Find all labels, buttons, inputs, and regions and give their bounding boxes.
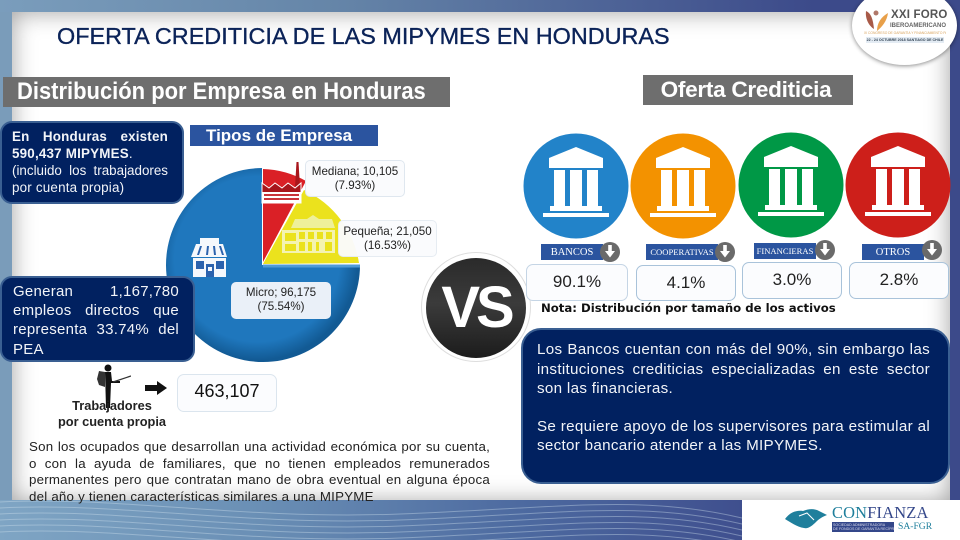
callout: mipymes: (incluido los trabajadores xyxy=(12,163,168,178)
circle: cooperativas xyxy=(630,134,736,238)
label: bancos: BANCOS xyxy=(551,247,593,258)
circle: financieras xyxy=(738,132,844,238)
vs disc xyxy=(426,258,526,358)
note: Nota: Distribución por tamaño de los activos xyxy=(541,301,836,315)
icon: handshake xyxy=(785,509,827,528)
pie chart xyxy=(166,162,360,362)
vs badge xyxy=(421,252,531,362)
heading: tipos de empresa: Tipos de Empresa xyxy=(206,126,352,145)
label: cooperativas xyxy=(646,244,718,260)
label: mediana xyxy=(305,160,405,197)
number box: trabajadores xyxy=(177,374,277,412)
icons: down arrows xyxy=(600,240,942,262)
label: pequena: (16.53%) xyxy=(364,239,411,252)
value: otros xyxy=(849,262,949,299)
callout: empleos: empleos directos que xyxy=(13,302,179,319)
text block: definicion: Son los ocupados que desarrollan una actividad económica por su cuenta, xyxy=(29,439,490,454)
value: bancos xyxy=(526,264,628,301)
label: bancos xyxy=(541,244,603,260)
logo name: XXI FORO xyxy=(891,9,948,21)
value: financieras: 3.0% xyxy=(773,270,811,289)
value: cooperativas: 4.1% xyxy=(667,273,705,292)
number box: trabajadores: 463,107 xyxy=(194,381,260,401)
heading: oferta crediticia: Oferta Crediticia xyxy=(661,77,831,102)
logo: XXI Foro Iberoamericano xyxy=(852,0,957,65)
callout: bancos: Los Bancos cuentan con más del 90%, sin embargo las xyxy=(537,341,930,358)
callout: empleos: Generan 1,167,780 xyxy=(13,283,179,300)
callout: bancos: sector bancario atender a las MIPYMES. xyxy=(537,437,823,454)
icon: office building xyxy=(282,215,335,253)
slice: mediana xyxy=(263,169,306,262)
worker label xyxy=(58,398,166,429)
callout: bancos xyxy=(521,328,950,484)
logo date xyxy=(866,37,944,43)
worker label: por cuenta propia xyxy=(58,414,166,429)
bottom ribbon xyxy=(0,500,742,540)
label: micro: Micro; 96,175 xyxy=(246,286,316,299)
slice: micro xyxy=(166,168,360,362)
icons: institution circles xyxy=(524,132,950,238)
callout: bancos: son las financieras. xyxy=(537,380,673,397)
label: otros: OTROS xyxy=(876,247,910,258)
label: financieras: FINANCIERAS xyxy=(757,246,813,256)
logo subtitle: IBEROAMERICANO xyxy=(890,23,946,29)
logo wordmark: CONFIANZA xyxy=(832,503,929,522)
slice: pequena xyxy=(263,190,359,264)
label: pequena xyxy=(338,220,437,257)
label: cooperativas: COOPERATIVAS xyxy=(650,247,714,257)
callout: empleos: representa 33.74% del xyxy=(13,321,179,338)
title: OFERTA CREDITICIA DE LAS MIPYMES EN HONDURAS xyxy=(57,23,670,49)
logo date: 22 - 24 OCTUBRE 2018 SANTIAGO DE CHILE xyxy=(867,38,943,42)
text block: definicion: o con la ayuda de familiares, que no tienen empleados remunerados xyxy=(29,456,490,471)
label: micro: (75.54%) xyxy=(257,300,305,313)
callout: mipymes: 590,437 MIPYMES. xyxy=(12,146,133,161)
label: pequena: Pequeña; 21,050 xyxy=(343,225,432,238)
heading: oferta crediticia xyxy=(643,75,853,105)
callout: mipymes: En Honduras existen xyxy=(12,129,168,144)
heading: distribucion: Distribución por Empresa en Honduras xyxy=(17,79,426,105)
icon: factory xyxy=(262,162,301,203)
callout: bancos: instituciones crediticias especializadas en este sector xyxy=(537,361,930,378)
callout: mipymes xyxy=(0,121,184,204)
circle: otros xyxy=(846,132,950,238)
value: cooperativas xyxy=(636,265,736,301)
circle: bancos xyxy=(524,134,628,238)
text block: definicion: permanentes pero que contratan mano de obra eventual en alguna época xyxy=(29,472,490,487)
vs disc: VS xyxy=(441,275,511,340)
logo subtitle: SOCIEDAD ADMINISTRADORA xyxy=(833,522,885,526)
label: otros xyxy=(862,244,924,260)
arrow xyxy=(145,381,167,395)
label: micro xyxy=(231,282,331,319)
callout: bancos: Se requiere apoyo de los supervisores para estimular al xyxy=(537,418,930,435)
value: financieras xyxy=(742,262,842,299)
value: otros: 2.8% xyxy=(880,270,918,289)
logo emblem xyxy=(866,10,888,31)
text block: definicion: del año y tienen características similares a una MIPYME xyxy=(29,489,374,504)
callout: mipymes: por cuenta propia) xyxy=(12,180,124,195)
logo subtitle xyxy=(832,522,894,532)
icon: store xyxy=(191,238,227,277)
value: bancos: 90.1% xyxy=(553,272,601,291)
logo suffix: SA-FGR xyxy=(898,521,932,532)
callout: empleos: PEA xyxy=(13,341,44,358)
icon: self-employed worker xyxy=(97,364,131,408)
worker label: Trabajadores xyxy=(72,398,152,413)
label: mediana: Mediana; 10,105 xyxy=(312,165,398,178)
label: mediana: (7.93%) xyxy=(335,179,375,192)
callout: empleos xyxy=(0,276,195,362)
logo: Confianza xyxy=(785,503,932,532)
label: financieras xyxy=(754,243,816,259)
text block: definicion xyxy=(29,439,490,504)
